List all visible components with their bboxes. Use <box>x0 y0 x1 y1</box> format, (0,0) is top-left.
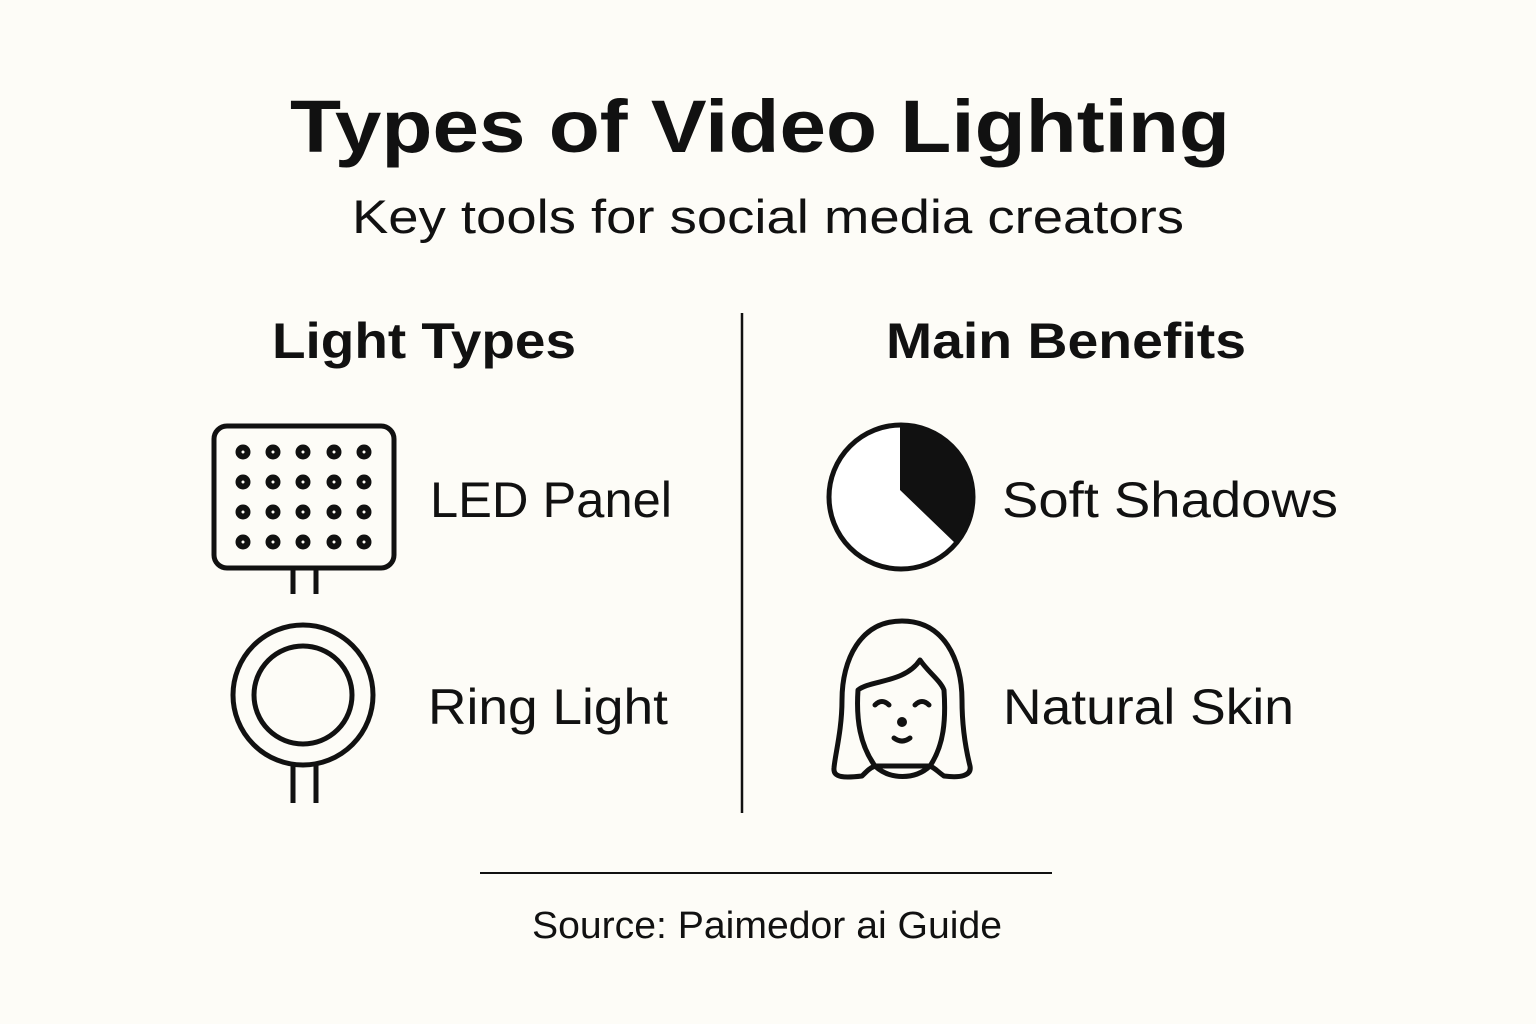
icon: pie soft shadows <box>829 425 973 569</box>
heading: main benefits: Main Benefits <box>886 313 1246 369</box>
source: Source: Paimedor ai Guide <box>532 905 1002 947</box>
subtitle: Key tools for social media creators <box>352 190 1184 243</box>
heading: light types: Light Types <box>272 313 576 369</box>
label: ring light: Ring Light <box>428 679 668 735</box>
label: LED panel: LED Panel <box>430 472 672 528</box>
icon: LED panel <box>214 426 394 594</box>
label: natural skin: Natural Skin <box>1003 679 1294 735</box>
label: soft shadows: Soft Shadows <box>1002 472 1338 528</box>
icon: face natural skin <box>834 621 970 777</box>
icon: ring light <box>233 625 373 803</box>
title: Types of Video Lighting <box>290 85 1230 168</box>
